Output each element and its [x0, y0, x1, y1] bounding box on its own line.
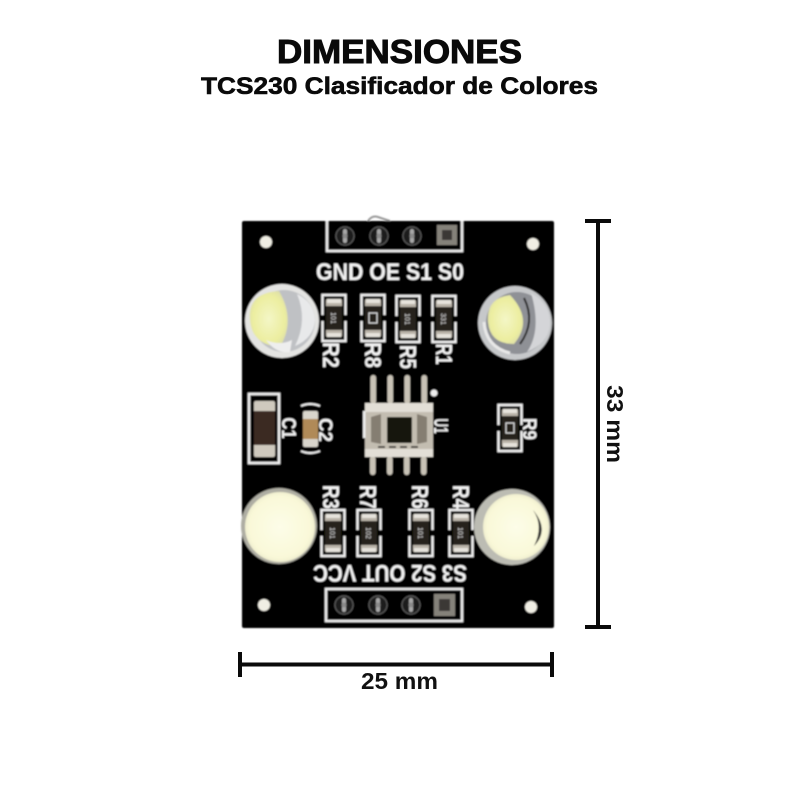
resistor labels: R9: [518, 418, 539, 440]
resistor labels: R4: [448, 485, 474, 509]
top header: [327, 221, 462, 251]
LED top left: [245, 284, 319, 358]
resistor labels: R5: [395, 345, 421, 369]
resistors: [322, 295, 522, 556]
resistor codes: [328, 312, 463, 539]
height dimension: 33 mm: [585, 221, 628, 627]
resistor codes: 101: [416, 527, 423, 539]
resistor codes: 101: [403, 313, 410, 325]
bottom header: [326, 589, 462, 621]
LED bottom right: [474, 489, 550, 565]
silkscreen labels: [277, 259, 539, 586]
color sensor chip: [363, 375, 438, 475]
resistor labels: R6: [407, 485, 433, 509]
pin labels bottom: S3 S2 OUT VCC: [313, 559, 467, 586]
wire stub above board: [368, 216, 390, 221]
resistor labels: R2: [318, 342, 344, 368]
resistor codes: 101: [328, 527, 335, 539]
resistor labels: R1: [431, 344, 457, 365]
LED top right: [478, 286, 552, 360]
subtitle: TCS230 Clasificador de Colores: [201, 73, 598, 100]
height dimension: 33 mm: 33 mm: [602, 385, 628, 463]
resistor labels: C1: [277, 418, 299, 438]
width dimension: 25 mm: 25 mm: [361, 668, 438, 694]
resistor labels: C2: [314, 418, 335, 442]
resistor labels: R7: [355, 485, 381, 509]
circuit board photo: [241, 216, 554, 628]
capacitor C1: [249, 394, 279, 463]
resistor codes: 102: [364, 527, 371, 539]
resistor labels: U1: [429, 418, 451, 434]
board: [242, 221, 554, 628]
resistor labels: R3: [318, 485, 344, 509]
mounting holes: [258, 236, 539, 613]
title: DIMENSIONES: [277, 33, 522, 70]
LED bottom left: [241, 488, 317, 564]
resistor codes: 101: [456, 527, 463, 539]
resistor codes: 101: [329, 312, 336, 324]
width dimension: 25 mm: [240, 652, 552, 694]
resistor labels: [277, 342, 539, 509]
pin labels top: GND OE S1 S0: [316, 259, 464, 286]
resistor labels: R8: [360, 342, 386, 368]
capacitor C2: [301, 404, 320, 453]
resistor codes: 331: [439, 313, 446, 325]
